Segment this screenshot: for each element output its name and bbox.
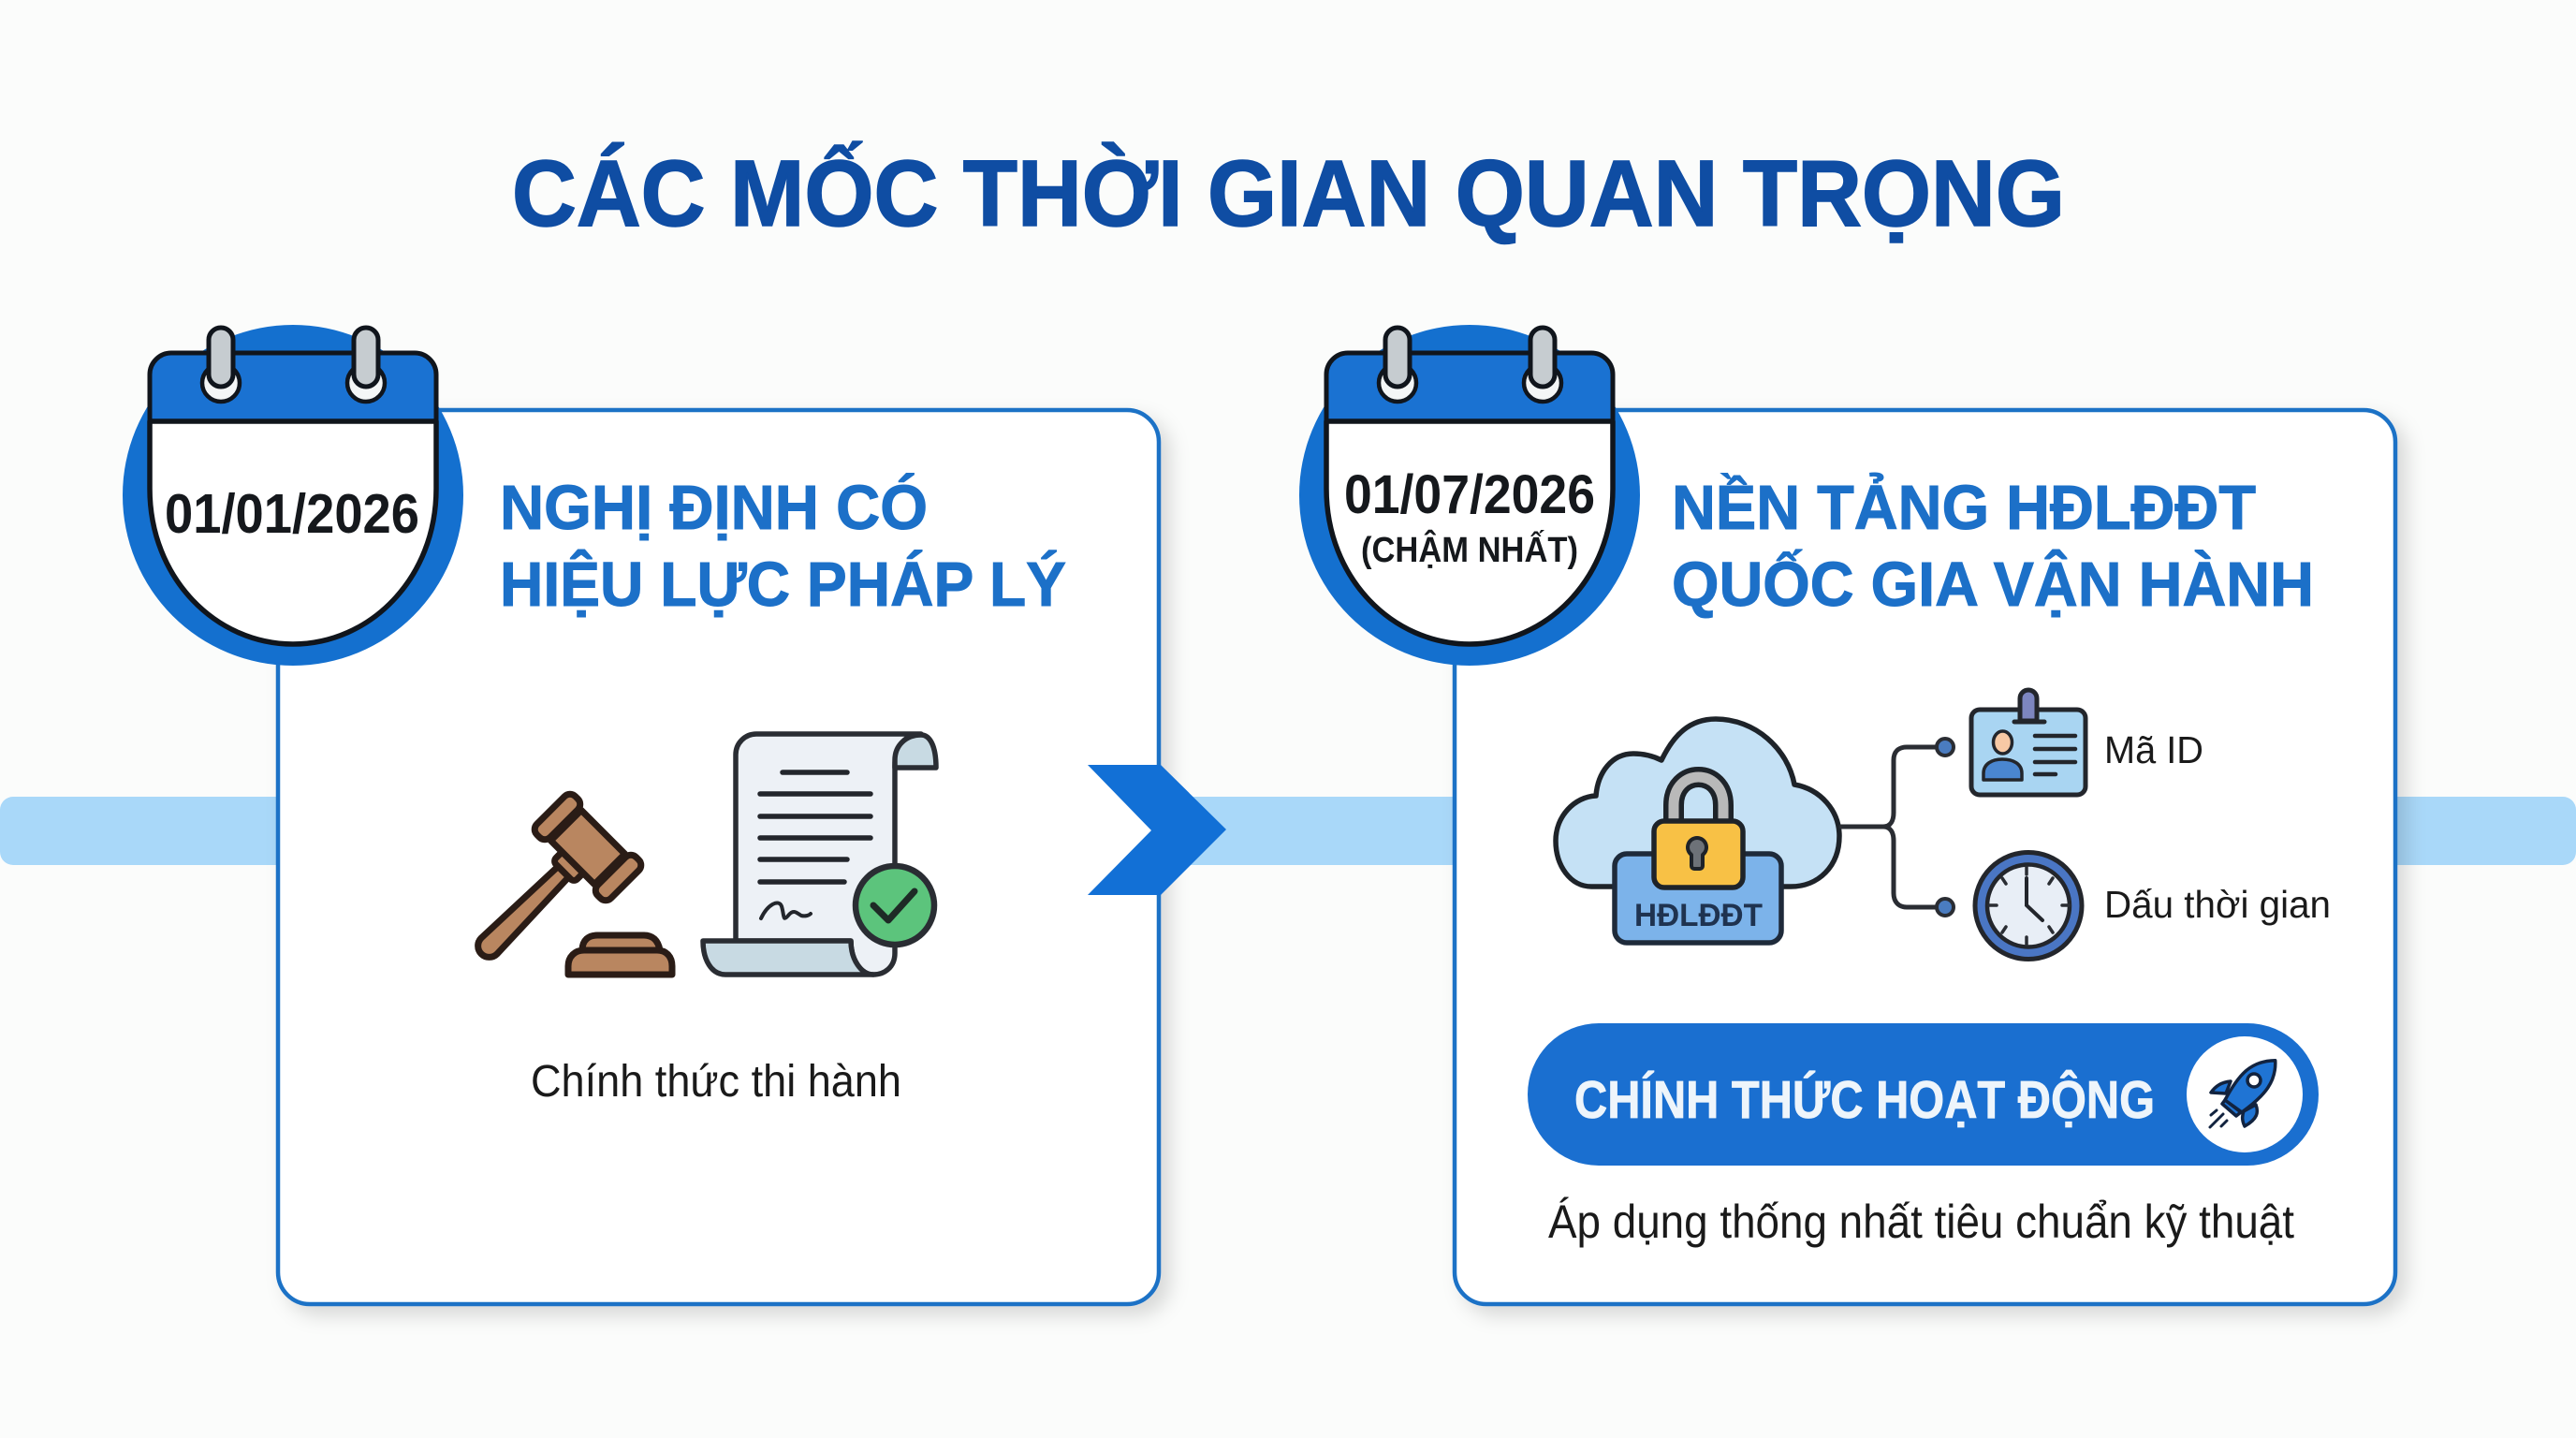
panel: 01/01/2026 decree milestone [123, 325, 1159, 1304]
status pill [1528, 1023, 2319, 1166]
icon: ID card [1971, 690, 2086, 795]
heading 1: HIỆU LỰC PHÁP LÝ [500, 550, 1066, 620]
date note: (CHẬM NHẤT) [1361, 529, 1578, 570]
heading 1 [500, 473, 1066, 620]
heading 1: NGHỊ ĐỊNH CÓ [500, 473, 928, 543]
panel: 01/07/2026 national platform milestone [1299, 325, 2395, 1304]
heading 2 [1672, 473, 2314, 620]
card 1 frame [278, 410, 1159, 1304]
text: timestamp: Dấu thời gian [2104, 883, 2331, 926]
icon: secured cloud [1556, 719, 1839, 943]
icon: gavel [445, 791, 672, 990]
date 2: 01/07/2026 [1344, 464, 1595, 525]
heading 2: QUỐC GIA VẬN HÀNH [1672, 549, 2314, 620]
pill text: CHÍNH THỨC HOẠT ĐỘNG [1574, 1069, 2155, 1130]
connector lines [1841, 739, 1954, 916]
text: officially enforced: Chính thức thi hành [531, 1057, 901, 1107]
icon: clock [1975, 852, 2082, 959]
icon: rocket [2210, 1061, 2276, 1127]
calendar badge 1 [123, 325, 463, 666]
text: ID code: Mã ID [2104, 728, 2203, 771]
icon: secured cloud: HĐLĐĐT [1634, 898, 1763, 933]
title: CÁC MỐC THỜI GIAN QUAN TRỌNG [512, 141, 2065, 246]
date 1: 01/01/2026 [165, 483, 419, 545]
arrow chevron [1088, 765, 1226, 895]
timeline band [0, 797, 2576, 865]
heading 2: NỀN TẢNG HĐLĐĐT [1672, 473, 2256, 543]
card 2 frame [1455, 410, 2395, 1304]
icon: legal document with check [703, 734, 936, 975]
calendar badge 2 [1299, 325, 1640, 666]
text: unified technical standard: Áp dụng thống nhất tiêu chuẩn kỹ thuật [1548, 1196, 2294, 1248]
